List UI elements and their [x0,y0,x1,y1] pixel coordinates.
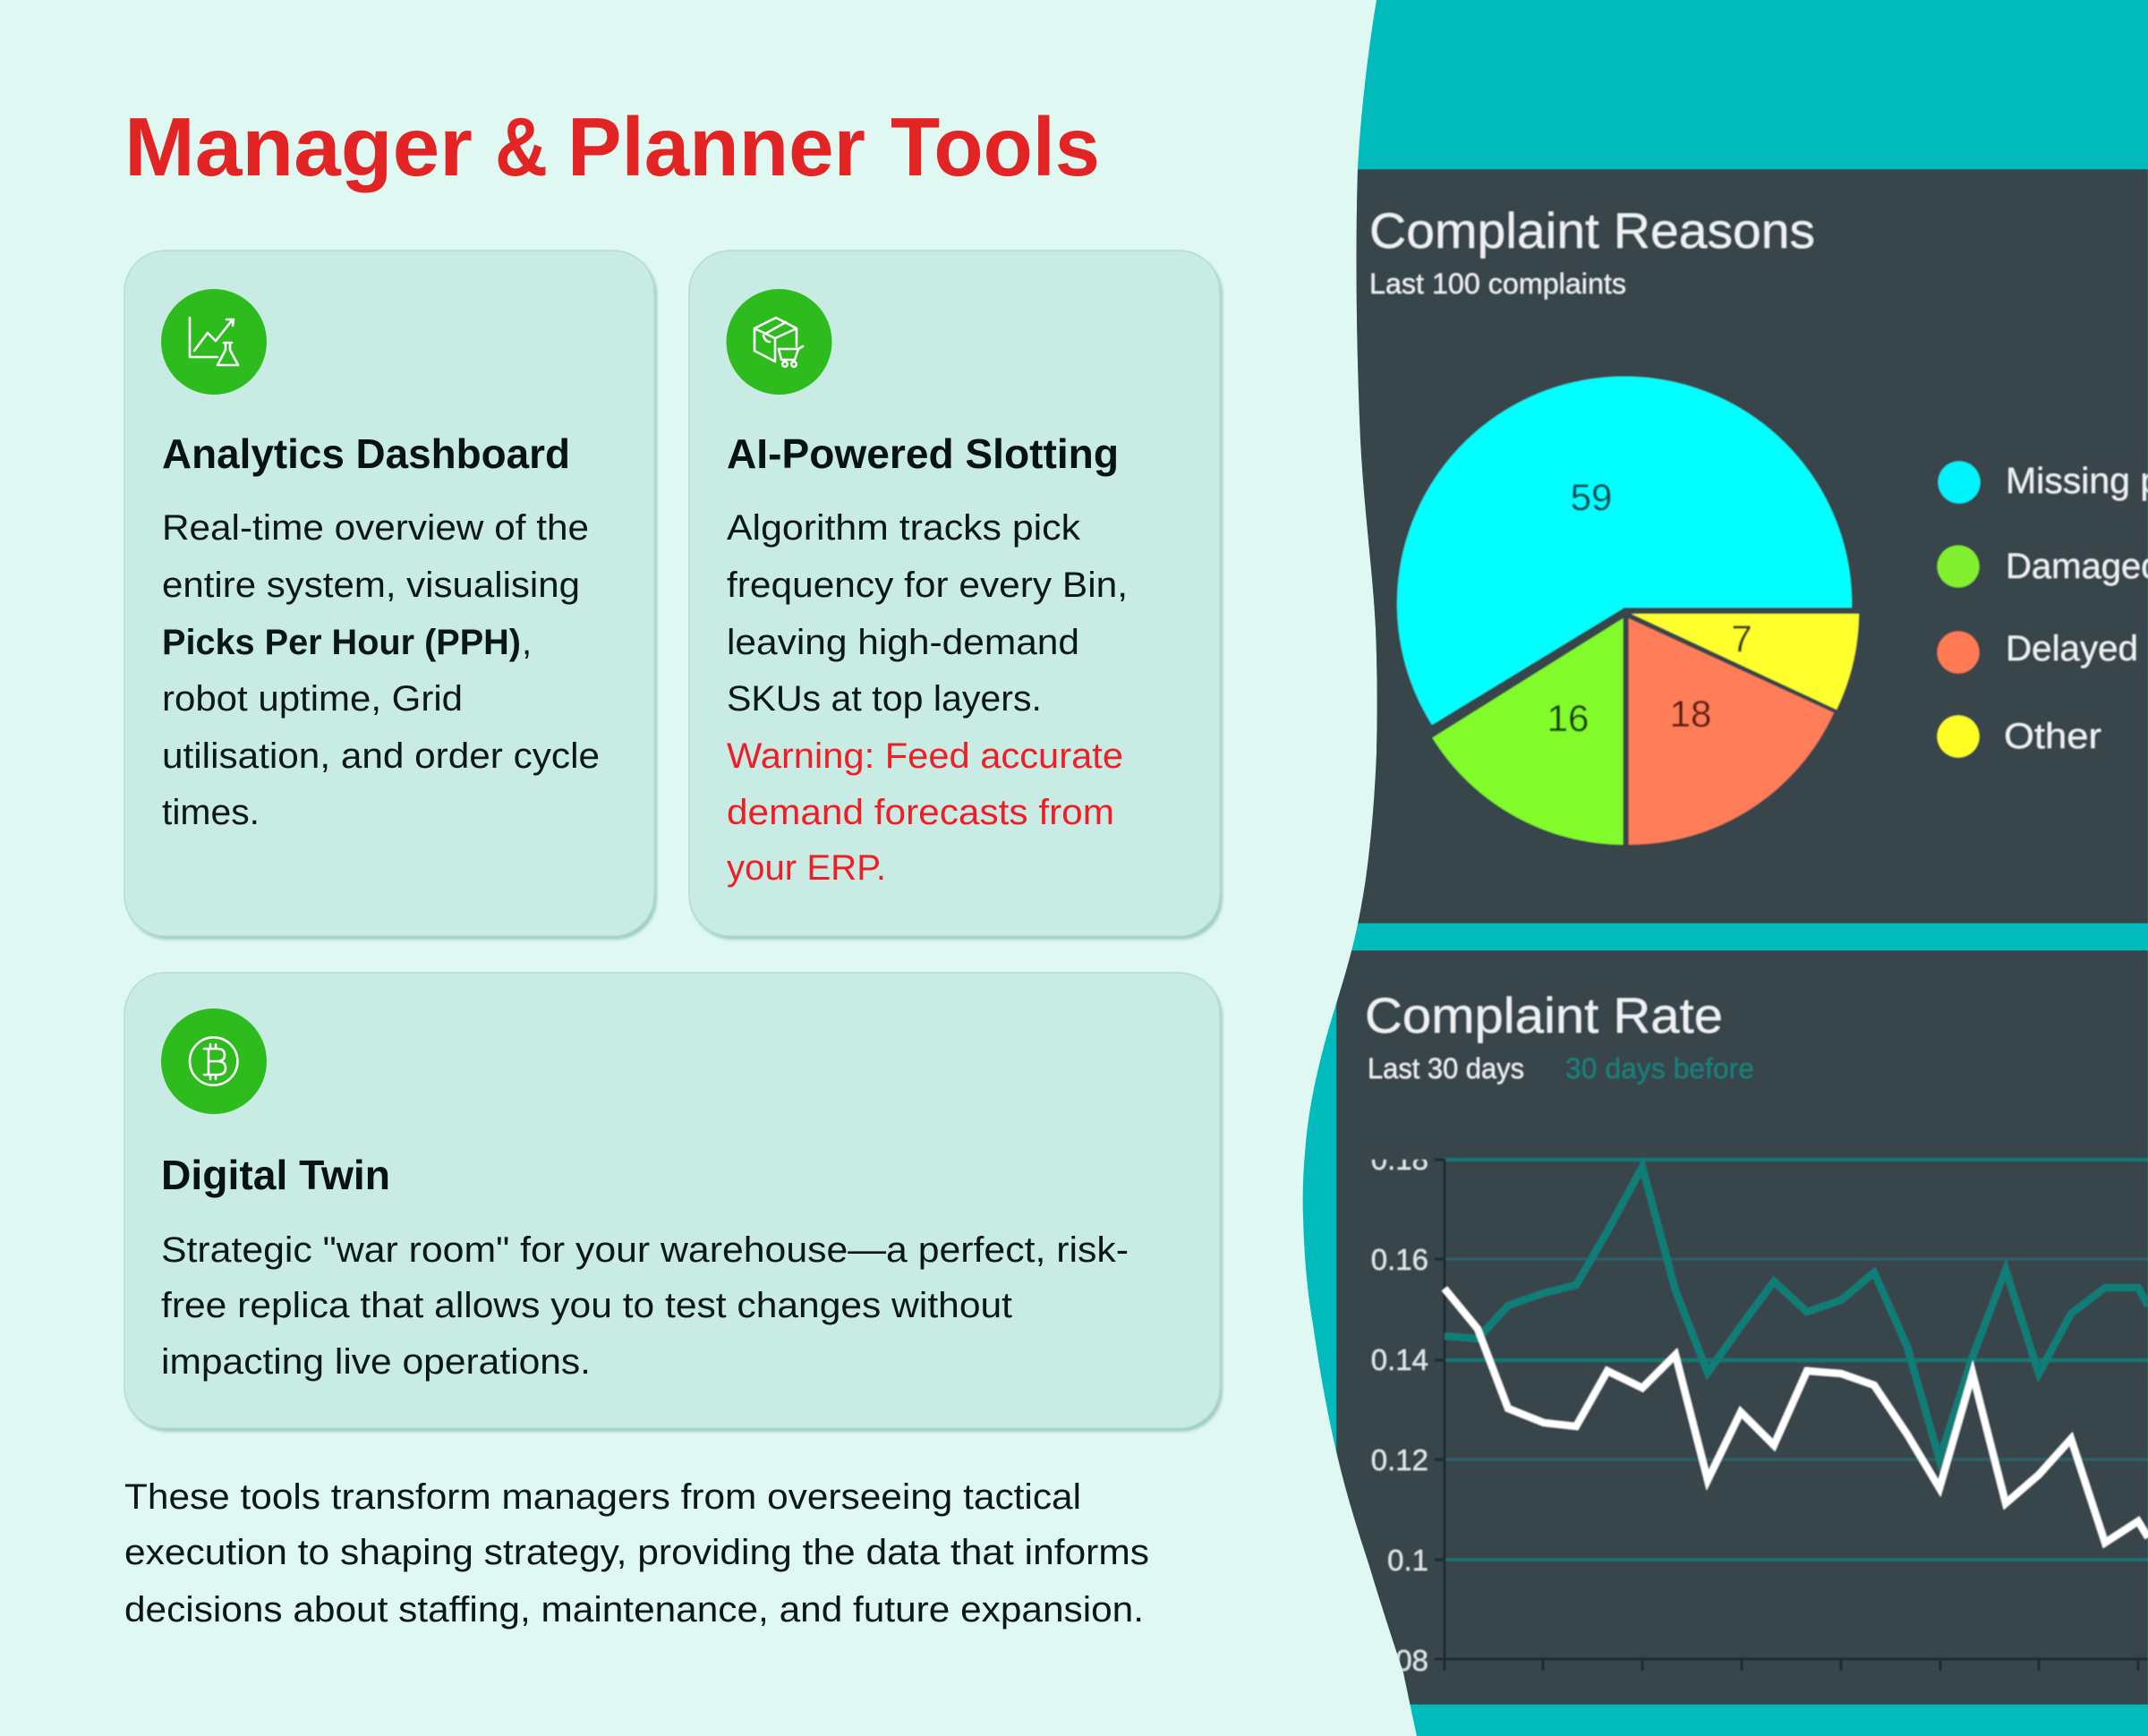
text block: Analytics Dashboard description: times. [162,793,260,832]
text block: Analytics Dashboard description: robot uptime, Grid [162,679,463,719]
text block: Digital Twin description: impacting live operations. [161,1342,591,1382]
warning text: your ERP. [727,848,886,888]
dashboard photo panel with wavy edge [1289,0,2148,1736]
text block: Analytics Dashboard description: utilisation, and order cycle [162,736,600,776]
legend: Other [2004,717,2101,756]
line chart: 0.18 [1371,1143,1428,1176]
line chart: 0.1 [1387,1544,1428,1577]
text block: Digital Twin description [161,1230,1129,1382]
warning text [727,736,1123,888]
text block: Analytics Dashboard description: Picks Per Hour (PPH) [162,623,521,662]
pie chart: 18 [1670,693,1711,735]
title: Manager [124,100,473,193]
icon: box and cart [727,289,832,395]
text block: AI-Powered Slotting description: leaving high-demand [727,623,1079,662]
line chart: 0.16 [1371,1243,1428,1276]
warning text: demand forecasts from [727,793,1114,832]
text block: AI-Powered Slotting description: SKUs at top layers. [727,679,1042,719]
panel: AI-Powered Slotting card [689,251,1223,940]
pie chart: 59 [1571,476,1612,518]
text block: Analytics Dashboard description: entire system, visualising [162,566,580,605]
heading: Digital Twin: Digital Twin [161,1152,390,1198]
legend [1937,460,2148,757]
title [124,100,1100,193]
title: Tools [891,100,1100,193]
text block: closing paragraph: execution to shaping strategy, providing the data that informs [124,1533,1149,1572]
title: Planner [567,100,865,193]
series label: last 30 days: Last 30 days [1368,1052,1524,1085]
chart title: Complaint Rate [1365,987,1723,1043]
text block: Analytics Dashboard description [162,508,600,832]
series label: 30 days before: 30 days before [1565,1052,1754,1085]
line chart: 0.14 [1371,1343,1428,1376]
line chart: 0.12 [1371,1443,1428,1476]
title: & [495,100,548,193]
pie chart: 16 [1547,697,1589,739]
line chart [1371,1143,2148,1677]
text block: Analytics Dashboard description: Real-time overview of the [162,508,589,548]
panel: Complaint Reasons chart [1355,169,2148,923]
text block: closing paragraph: decisions about staffing, maintenance, and future expansion. [124,1590,1144,1630]
text block: AI-Powered Slotting description: frequency for every Bin, [727,566,1128,605]
warning text: Warning: Feed accurate [727,736,1123,776]
chart title: Complaint Reasons [1369,202,1815,259]
line chart: 0.08 [1371,1644,1428,1677]
panel: Complaint Rate chart [1336,950,2148,1705]
heading: Analytics Dashboard: Analytics Dashboard [162,430,570,477]
text block: AI-Powered Slotting description: Algorithm tracks pick [727,508,1081,548]
text block: closing paragraph [124,1477,1149,1630]
panel: Digital Twin card [124,973,1223,1432]
heading: AI-Powered Slotting: AI-Powered Slotting [727,430,1119,477]
text block: Digital Twin description: Strategic "war room" for your warehouse—a perfect, risk- [161,1230,1129,1270]
chart subtitle: Last 100 complaints [1369,268,1626,300]
text block: closing paragraph: These tools transform managers from overseeing tactical [124,1477,1081,1517]
legend: Delayed [2006,629,2138,668]
pie chart: 7 [1731,617,1752,660]
text block: AI-Powered Slotting description [727,508,1128,719]
icon: coin [161,1008,267,1114]
icon: chart and flask [161,289,267,395]
text block: Analytics Dashboard description: , [522,623,532,662]
pie chart [1397,377,1859,845]
panel: Analytics Dashboard card [124,251,657,940]
text block: Digital Twin description: free replica that allows you to test changes without [161,1286,1012,1325]
